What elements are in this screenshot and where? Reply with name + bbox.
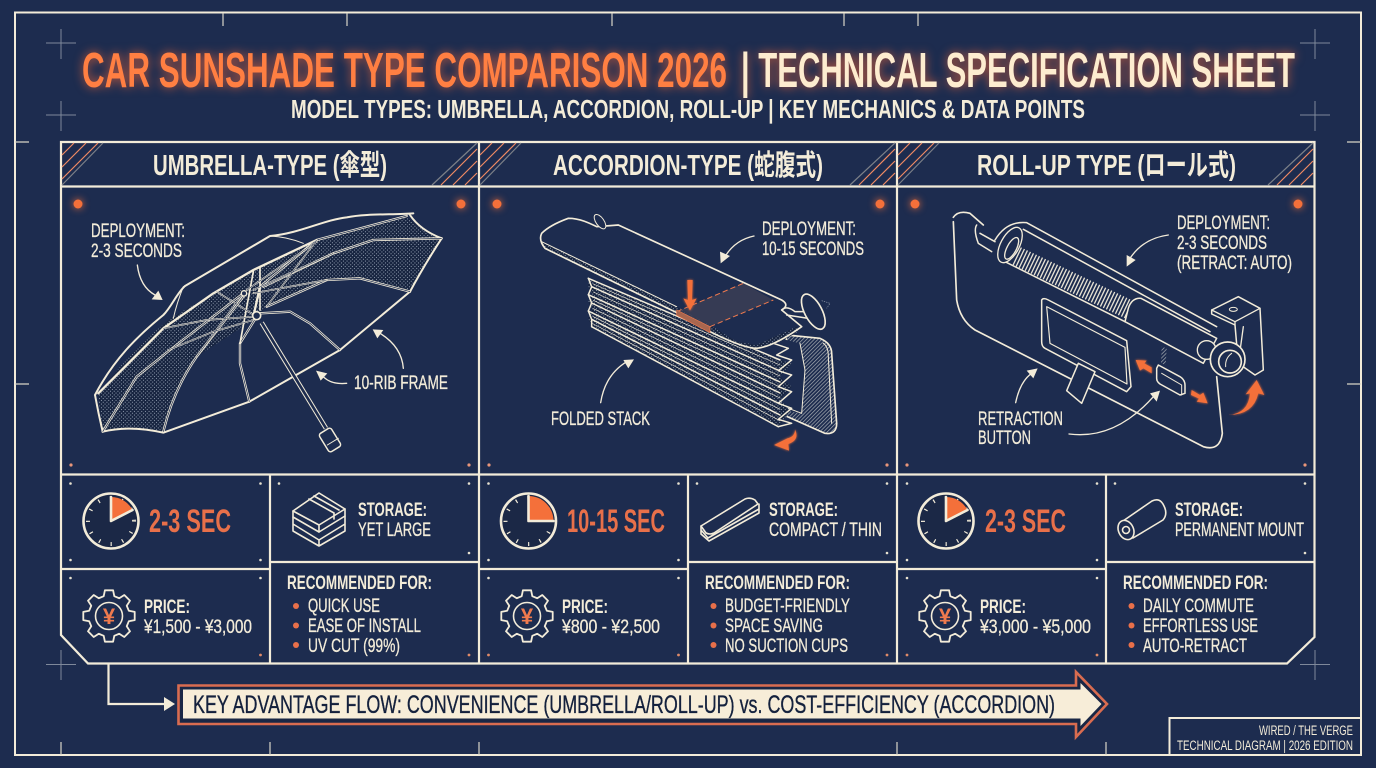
price text: roll-up — [979, 597, 1091, 638]
storage icon: stacked layers — [293, 493, 345, 546]
accordion illustration — [540, 213, 837, 451]
roll-up illustration — [953, 212, 1264, 448]
subtitle: MODEL TYPES: UMBRELLA, ACCORDION, ROLL-UP | KEY MECHANICS & DATA POINTS — [291, 94, 1085, 124]
storage text: roll-up: PERMANENT MOUNT — [1175, 520, 1304, 541]
connector arrow to advantage banner — [108, 664, 175, 711]
price icon: umbrella: ¥ — [103, 604, 116, 629]
bracket and knob — [1197, 297, 1263, 377]
roll-up callouts — [978, 213, 1292, 449]
recommended list: roll-up: AUTO-RETRACT — [1143, 636, 1247, 657]
header corner stripes — [62, 143, 1313, 185]
clock icon: roll-up — [918, 494, 974, 548]
umbrella callouts: 10-RIB FRAME — [354, 373, 448, 394]
storage text: umbrella: YET LARGE — [358, 520, 431, 541]
suction cup — [782, 291, 830, 333]
recommended list: umbrella: EASE OF INSTALL — [308, 616, 421, 637]
folded stack — [588, 278, 805, 427]
umbrella callouts — [91, 221, 448, 394]
accordion callouts: FOLDED STACK — [551, 409, 650, 430]
price icon: umbrella — [83, 590, 135, 642]
price icon: accordion — [501, 590, 553, 642]
storage icon: permanent cylinder — [1115, 500, 1166, 542]
price text: accordion: ¥800 - ¥2,500 — [561, 617, 660, 638]
accordion callouts — [551, 219, 864, 430]
storage text: umbrella: STORAGE: — [358, 500, 427, 521]
recommended list: umbrella: QUICK USE — [308, 596, 380, 617]
retraction button — [1157, 347, 1185, 395]
roll-up callouts: DEPLOYMENT: — [1177, 213, 1270, 234]
umbrella ribs — [98, 216, 442, 432]
deployment time: umbrella: 2-3 SEC — [149, 503, 231, 539]
price text: roll-up: PRICE: — [980, 597, 1026, 618]
clock icon: umbrella — [84, 494, 138, 548]
orange dashed measurement zone — [677, 280, 773, 333]
callout arrows — [137, 265, 403, 384]
umbrella shaft and handle — [262, 323, 342, 453]
price text: accordion: PRICE: — [562, 597, 608, 618]
recommended list: roll-up: EFFORTLESS USE — [1143, 616, 1258, 637]
panel headings: UMBRELLA-TYPE (傘型) — [153, 149, 387, 182]
orange fold arrow — [774, 429, 796, 451]
price icon: roll-up — [919, 590, 971, 642]
deployment time: roll-up: 2-3 SEC — [985, 503, 1066, 539]
storage text: roll-up: STORAGE: — [1175, 500, 1243, 521]
callout arrows — [1016, 235, 1168, 435]
accordion callouts: DEPLOYMENT: — [762, 219, 856, 240]
panel corner indicator dots — [69, 200, 1307, 467]
recommended list: accordion: RECOMMENDED FOR: — [705, 573, 850, 594]
deployment time: accordion: 10-15 SEC — [567, 503, 665, 539]
roll-up callouts: (RETRACT: AUTO) — [1177, 253, 1292, 274]
roll-up callouts: BUTTON — [978, 428, 1031, 449]
recommended list: umbrella — [287, 573, 432, 657]
recommended list: accordion: SPACE SAVING — [725, 616, 823, 637]
recommended list: accordion: NO SUCTION CUPS — [725, 636, 848, 657]
storage text: umbrella — [358, 500, 431, 541]
price text: umbrella: ¥1,500 - ¥3,000 — [143, 617, 252, 638]
key advantage flow banner arrow — [178, 672, 1107, 737]
roller housing and spring — [975, 222, 1217, 363]
panel headings — [153, 149, 1236, 182]
recommended list: roll-up — [1123, 573, 1268, 657]
storage text: roll-up — [1175, 500, 1304, 541]
clock icon: accordion — [501, 494, 556, 548]
cell corner dots — [69, 482, 1306, 656]
top plate — [540, 213, 802, 349]
accordion callouts: 10-15 SECONDS — [762, 239, 864, 260]
source credit box — [1170, 718, 1361, 755]
visor body — [953, 212, 1222, 448]
storage icon: thin folded pack — [701, 498, 759, 541]
recommended list: roll-up: DAILY COMMUTE — [1143, 596, 1254, 617]
umbrella callouts: 2-3 SECONDS — [91, 241, 182, 262]
comparison table grid — [61, 142, 1314, 664]
recommended list: accordion — [705, 573, 850, 657]
price text: accordion — [561, 597, 660, 638]
roll-up callouts: 2-3 SECONDS — [1177, 233, 1267, 254]
umbrella illustration — [95, 213, 442, 453]
price icon: roll-up: ¥ — [939, 604, 952, 629]
mirror panel — [1042, 299, 1131, 392]
price text: roll-up: ¥3,000 - ¥5,000 — [979, 617, 1091, 638]
panel headings: ROLL-UP TYPE (ロール式) — [977, 149, 1236, 182]
title: CAR SUNSHADE TYPE COMPARISON 2026 — [82, 44, 727, 98]
orange motion arrows — [1136, 360, 1264, 415]
pull tab — [1067, 363, 1095, 403]
recommended list: umbrella: RECOMMENDED FOR: — [287, 573, 432, 594]
storage text: accordion: STORAGE: — [769, 500, 838, 521]
callout arrows — [601, 236, 754, 403]
recommended list: umbrella: UV CUT (99%) — [308, 636, 400, 657]
storage text: accordion: COMPACT / THIN — [769, 520, 882, 541]
recommended list: accordion: BUDGET-FRIENDLY — [725, 596, 850, 617]
key advantage flow banner arrow: KEY ADVANTAGE FLOW: CONVENIENCE (UMBRELLA/ROLL-UP) vs. COST-EFFICIENCY (ACCORDION) — [193, 691, 1055, 719]
recommended list: roll-up: RECOMMENDED FOR: — [1123, 573, 1268, 594]
umbrella callouts: DEPLOYMENT: — [91, 221, 185, 242]
storage text: accordion — [769, 500, 882, 541]
price icon: accordion: ¥ — [521, 604, 534, 629]
price text: umbrella — [143, 597, 252, 638]
back panel — [780, 335, 837, 434]
roll-up callouts: RETRACTION — [978, 409, 1063, 430]
price text: umbrella: PRICE: — [144, 597, 190, 618]
panel headings: ACCORDION-TYPE (蛇腹式) — [553, 149, 823, 182]
umbrella canopy — [95, 213, 442, 433]
